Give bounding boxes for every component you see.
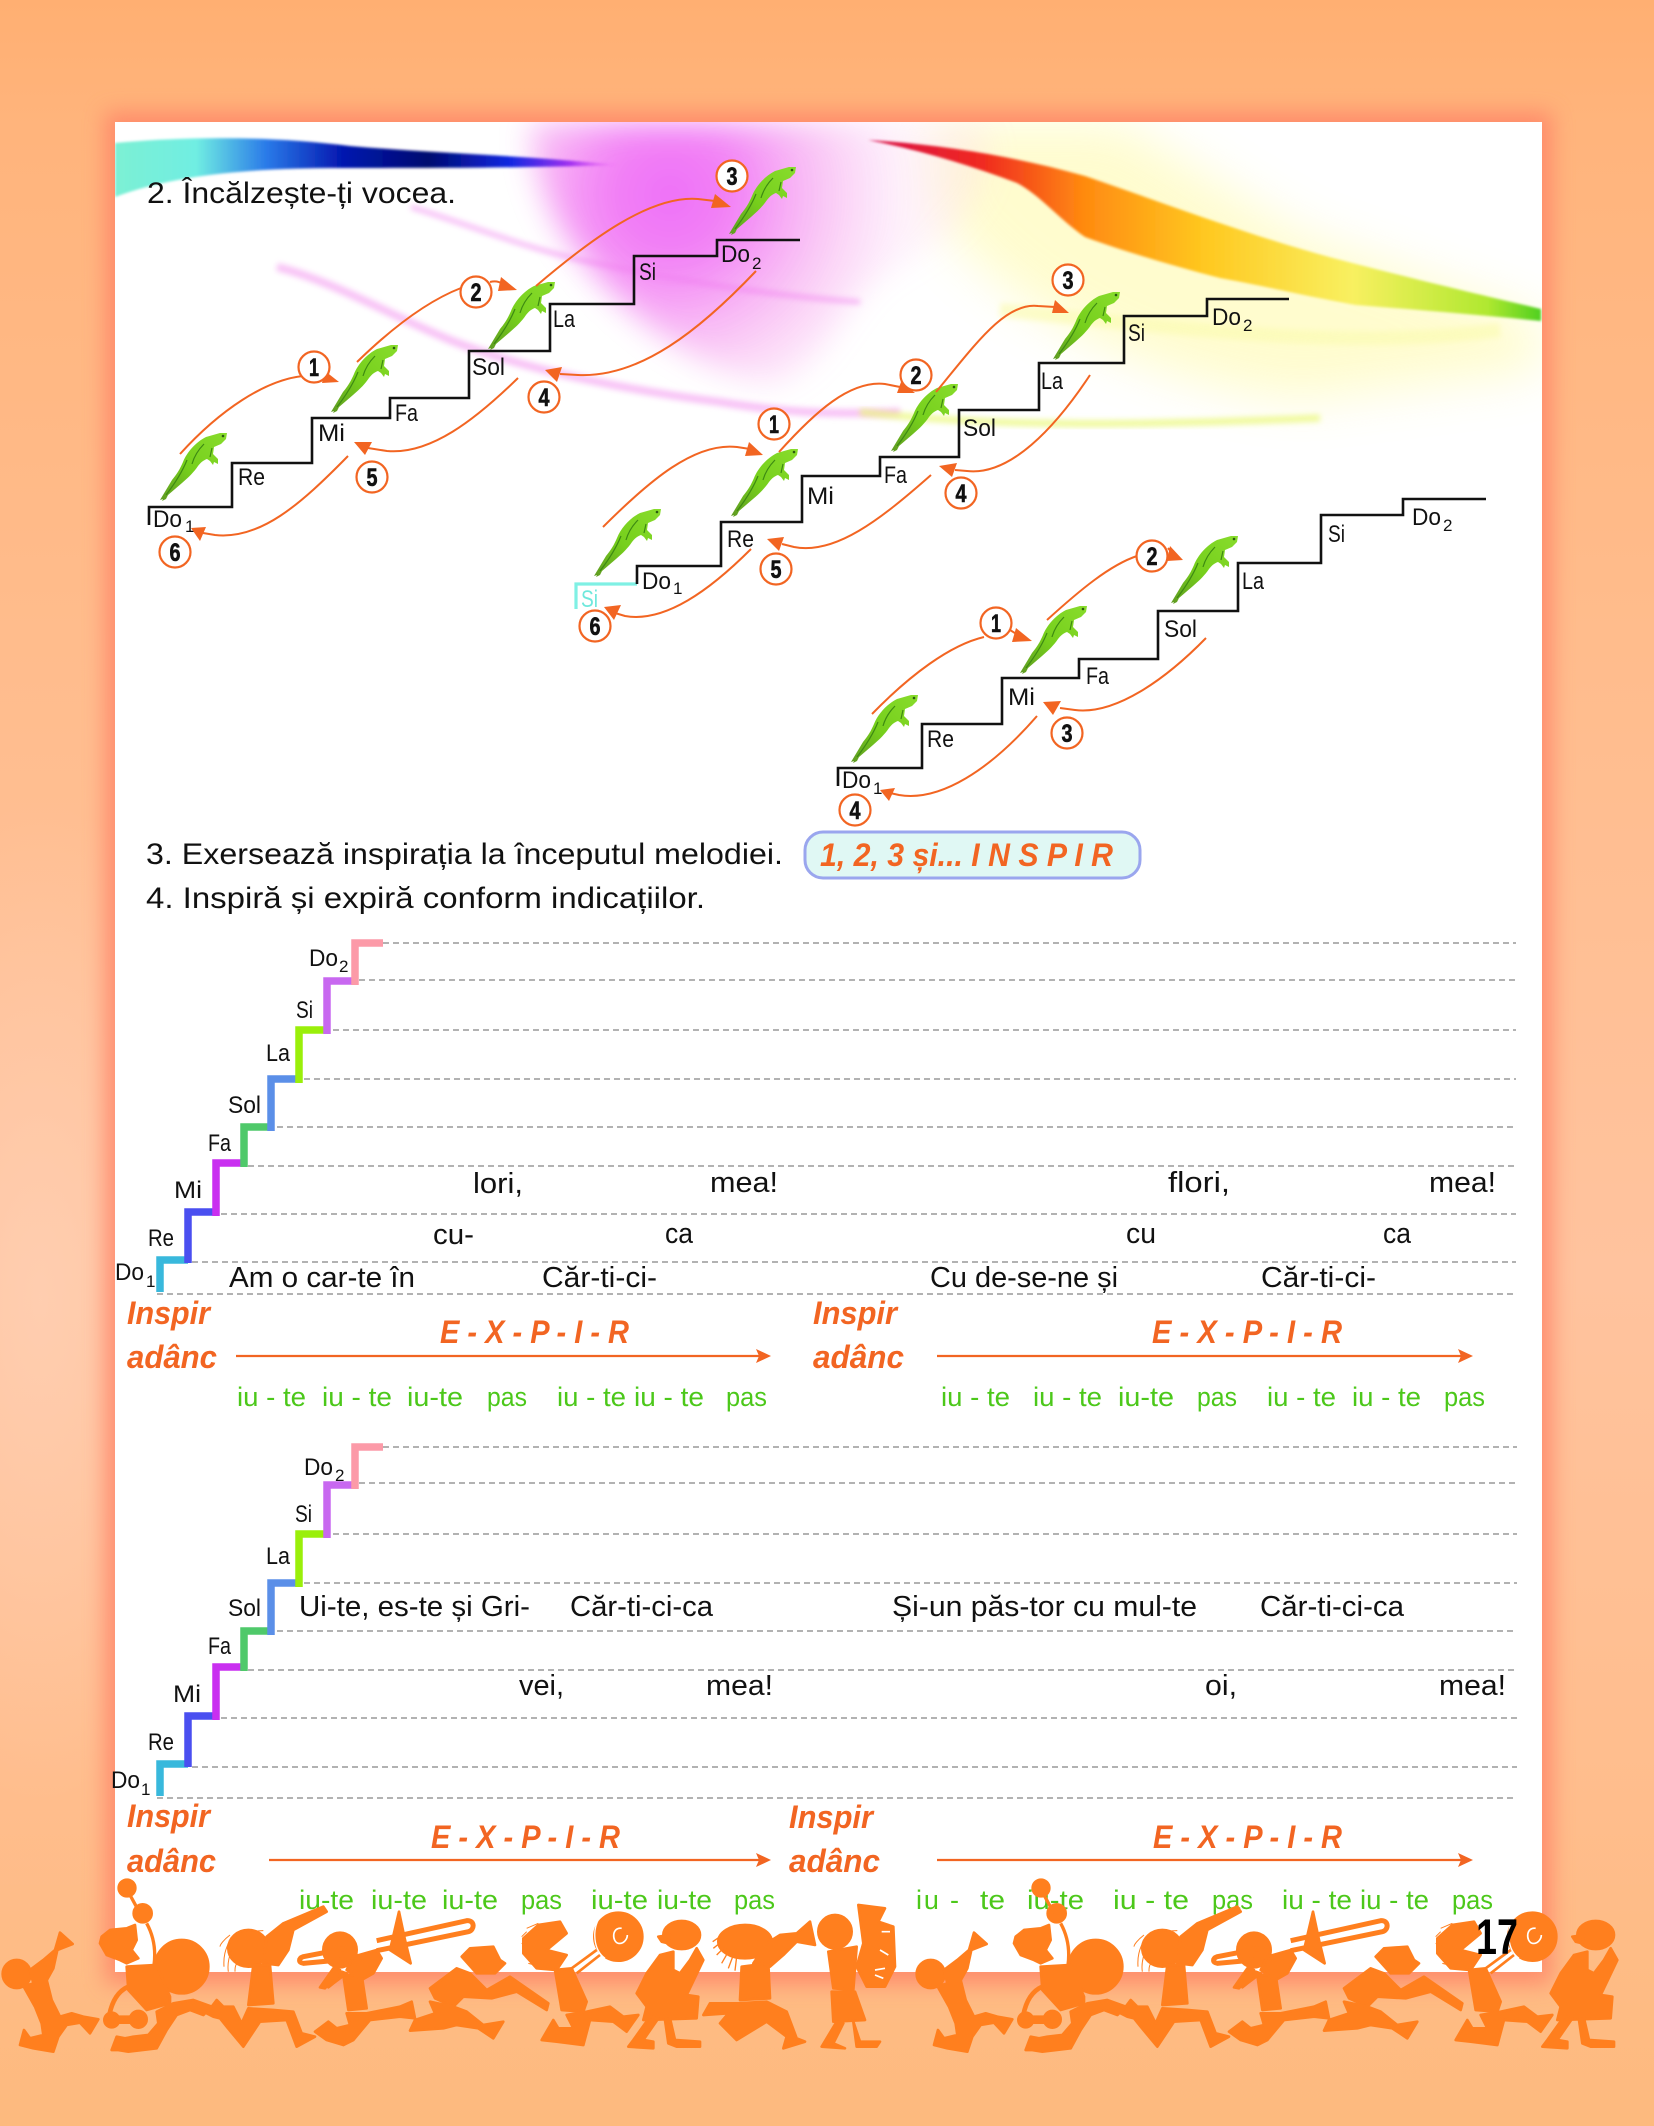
note labels 1: Si: [639, 259, 656, 286]
note labels 3: La: [1242, 568, 1265, 595]
rhythm words B: pas: [1212, 1885, 1253, 1915]
rhythm words B: iu-te: [299, 1885, 354, 1915]
stairs 1: [149, 240, 800, 525]
arrows 3: [872, 546, 1206, 801]
note labels 1: Mi: [318, 420, 345, 447]
note labels 3: Fa: [1086, 663, 1110, 690]
staircase exercise 3: [838, 499, 1486, 826]
note labels 3: Sol: [1164, 616, 1197, 643]
note labels A: 1: [146, 1272, 155, 1291]
lyrics B: vei,: [519, 1670, 564, 1702]
rhythm words B: iu-te: [371, 1885, 427, 1915]
rhythm words A: iu - te: [322, 1382, 392, 1412]
lyrics A: Cu de-se-ne și: [930, 1262, 1118, 1294]
breathing cues B: Inspir: [127, 1798, 211, 1834]
lyrics A: Am o car-te în: [229, 1262, 415, 1294]
staircase exercise 2: [576, 264, 1289, 642]
note labels 1: 1: [185, 517, 194, 536]
panel glow: [105, 112, 1552, 1984]
note labels A: Re: [148, 1225, 174, 1252]
note labels 3: Re: [927, 726, 954, 753]
number badges 2: 5: [770, 556, 782, 584]
note labels A: Do: [115, 1259, 144, 1286]
rhythm words B: pas: [1452, 1885, 1493, 1915]
note labels A: Si: [296, 997, 313, 1024]
number badges 1: [160, 160, 748, 568]
note labels 1: [153, 241, 761, 536]
rhythm words A: iu - te: [557, 1382, 626, 1412]
lyrics B: Căr-ti-ci-ca: [1260, 1591, 1405, 1623]
note labels 3: Mi: [1008, 684, 1035, 711]
note labels 3: 2: [1443, 516, 1452, 535]
rhythm words A: pas: [1197, 1382, 1237, 1412]
rhythm words B: pas: [734, 1885, 775, 1915]
lyrics A: flori,: [1168, 1167, 1230, 1199]
frogs 3: [851, 536, 1238, 763]
rhythm words B: pas: [521, 1885, 562, 1915]
breathing cues B: E - X - P - I - R: [431, 1819, 620, 1855]
rainbow decoration: [115, 122, 1541, 424]
callout: 1, 2, 3 si inspir: 1, 2, 3 și... I N S P I R: [820, 837, 1113, 873]
note labels A: Mi: [174, 1177, 202, 1204]
note labels 2: Re: [727, 526, 754, 553]
note labels 3: Do: [1412, 504, 1441, 531]
number badges 2: 4: [956, 480, 967, 508]
note labels 2: Do: [1212, 304, 1241, 331]
lyrics B: mea!: [1439, 1670, 1506, 1702]
note labels A: 2: [339, 957, 348, 976]
rhythm words A: pas: [487, 1382, 527, 1412]
lyrics A: cu-: [433, 1219, 474, 1251]
cyan extra step: [576, 584, 637, 609]
rhythm words A: pas: [726, 1382, 767, 1412]
rhythm words A: pas: [1444, 1382, 1485, 1412]
number badges 2: 2: [910, 362, 922, 390]
lyrics A: mea!: [710, 1167, 778, 1199]
note labels 1: La: [553, 306, 576, 333]
rhythm words B: iu -: [916, 1885, 959, 1915]
flute runner, round-drum player, saxophone player: [410, 1913, 703, 2048]
note labels 1: Do: [153, 506, 182, 533]
staircase exercise 1: [149, 160, 800, 568]
melody ladder A: [115, 943, 1516, 1412]
breathing cues A: adânc: [813, 1339, 904, 1375]
rhythm words A: iu - te: [1033, 1382, 1102, 1412]
note labels 1: Re: [238, 464, 265, 491]
lyrics B: [299, 1591, 1506, 1702]
rhythm words A: iu - te: [1267, 1382, 1336, 1412]
lyrics A: [229, 1167, 1496, 1294]
lyrics A: ca: [665, 1218, 694, 1250]
breathing cues A: Inspir: [813, 1295, 898, 1331]
trumpet runner and bass drummer, cymbal runner, trombonist: [3, 1880, 473, 2052]
note labels A: [115, 945, 348, 1291]
number badges 1: 2: [470, 279, 482, 307]
note labels A: Do: [309, 945, 338, 972]
rhythm words B: iu-te: [591, 1885, 648, 1915]
note labels B: [111, 1454, 344, 1799]
breathing cues A: Inspir: [127, 1295, 211, 1331]
note labels 3: Si: [1328, 521, 1345, 548]
stairs 2: [637, 299, 1289, 584]
lyrics B: oi,: [1205, 1670, 1237, 1702]
number badges 2: 3: [1062, 267, 1074, 295]
rhythm words A: iu-te: [1118, 1382, 1174, 1412]
rhythm words B: iu-te: [1027, 1885, 1084, 1915]
note labels B: La: [266, 1543, 291, 1570]
note labels 2: [581, 304, 1252, 613]
rhythm words B: te: [980, 1885, 1005, 1915]
number badges 1: 5: [366, 464, 378, 492]
note labels 1: 2: [752, 254, 761, 273]
breathing cues A: E - X - P - I - R: [440, 1314, 629, 1350]
lyrics B: Și-un păs-tor cu mul-te: [892, 1591, 1197, 1623]
stairs 3: [838, 499, 1486, 786]
rhythm words B: iu - te: [1360, 1885, 1429, 1915]
heading: exercise 3: 3. Exersează inspirația la începutul melodiei.: [146, 838, 783, 871]
note labels B: Fa: [208, 1633, 232, 1660]
breathing cues A: [127, 1295, 1342, 1375]
note labels 2: Do: [642, 568, 671, 595]
lyrics B: Ui-te, es-te și Gri-: [299, 1591, 530, 1623]
note labels B: Sol: [228, 1595, 261, 1622]
expire arrows B: [269, 1853, 1473, 1867]
rhythm words B: iu-te: [657, 1885, 712, 1915]
dashed staff lines A: [157, 943, 1516, 1294]
rhythm words A: iu - te: [634, 1382, 704, 1412]
number badges 2: [580, 264, 1084, 642]
melody ladder B: [111, 1447, 1517, 1915]
number badges 1: 6: [170, 539, 180, 567]
rhythm words B: [299, 1885, 1493, 1915]
coloured steps B: [160, 1447, 383, 1796]
long-hair trumpeter and tuba player: [703, 1905, 895, 2048]
number badges 3: 4: [850, 797, 861, 825]
breathing cues B: E - X - P - I - R: [1153, 1819, 1342, 1855]
lyrics A: Căr-ti-ci-: [1261, 1262, 1376, 1294]
breathing cues B: adânc: [127, 1843, 216, 1879]
breathing cues A: adânc: [127, 1339, 217, 1375]
note labels B: 1: [141, 1780, 150, 1799]
white page panel: [115, 122, 1542, 1972]
note labels 1: Do: [721, 241, 750, 268]
rhythm words B: iu-te: [442, 1885, 498, 1915]
number badges 3: 2: [1146, 543, 1158, 571]
breathing cues A: E - X - P - I - R: [1152, 1314, 1342, 1350]
note labels B: 2: [335, 1466, 344, 1485]
lyrics A: Căr-ti-ci-: [542, 1262, 657, 1294]
rhythm words A: [237, 1382, 1485, 1412]
lyrics A: cu: [1126, 1218, 1156, 1250]
number badges 2: 6: [590, 613, 600, 641]
note labels 2: Mi: [807, 483, 834, 510]
rhythm words A: iu - te: [941, 1382, 1010, 1412]
heading: exercise 4: 4. Inspiră și expiră conform indicațiilor.: [146, 882, 705, 915]
breathing cues B: adânc: [789, 1843, 880, 1879]
arrows 2: [603, 300, 1090, 620]
number badges 3: 3: [1062, 720, 1072, 748]
rhythm words B: iu - te: [1282, 1885, 1352, 1915]
lyrics B: Căr-ti-ci-ca: [570, 1591, 714, 1623]
frogs 2: [594, 292, 1120, 577]
note labels 3: 1: [873, 779, 882, 798]
note labels B: Mi: [173, 1681, 201, 1708]
page number: 17: [1476, 1909, 1518, 1965]
rhythm words A: iu-te: [407, 1382, 463, 1412]
number badges 3: [840, 540, 1168, 826]
note labels 2: Si: [581, 586, 598, 613]
note labels A: Fa: [208, 1130, 232, 1157]
lyrics B: mea!: [706, 1670, 773, 1702]
number badges 1: 1: [309, 354, 319, 382]
heading: exercise 2: 2. Încălzește-ți vocea.: [147, 177, 456, 210]
frogs 1: [160, 167, 796, 501]
note labels A: La: [266, 1040, 291, 1067]
note labels 2: Si: [1128, 320, 1145, 347]
note labels B: Re: [148, 1729, 174, 1756]
rhythm words B: iu - te: [1113, 1885, 1189, 1915]
number badges 1: 3: [726, 163, 738, 191]
note labels 3: Do: [842, 767, 871, 794]
number badges 3: 1: [991, 610, 1001, 638]
note labels 2: La: [1041, 368, 1064, 395]
note labels 2: 1: [673, 579, 682, 598]
number badges 2: 1: [769, 411, 779, 439]
marching band silhouettes: [3, 1880, 1617, 2052]
coloured steps A: [160, 943, 383, 1292]
lyrics A: mea!: [1429, 1167, 1496, 1199]
lyrics A: lori,: [473, 1168, 523, 1200]
dashed staff lines B: [157, 1447, 1517, 1798]
breathing cues B: Inspir: [789, 1799, 874, 1835]
breathing cues B: [127, 1798, 1342, 1879]
note labels 2: 2: [1243, 316, 1252, 335]
note labels 1: Fa: [395, 400, 419, 427]
expire arrows A: [236, 1349, 1473, 1363]
lyrics A: ca: [1383, 1218, 1412, 1250]
note labels 1: Sol: [472, 354, 505, 381]
rhythm words A: iu - te: [237, 1382, 306, 1412]
note labels 2: Fa: [884, 462, 908, 489]
note labels B: Do: [111, 1767, 140, 1794]
arrows 1: [180, 194, 756, 541]
note labels 2: Sol: [963, 415, 996, 442]
note labels A: Sol: [228, 1092, 261, 1119]
note labels B: Si: [295, 1501, 312, 1528]
rhythm words A: iu - te: [1352, 1382, 1421, 1412]
number badges 1: 4: [538, 384, 550, 412]
second run of band figures: [917, 1880, 1617, 2052]
note labels B: Do: [304, 1454, 333, 1481]
note labels 3: [842, 504, 1452, 798]
